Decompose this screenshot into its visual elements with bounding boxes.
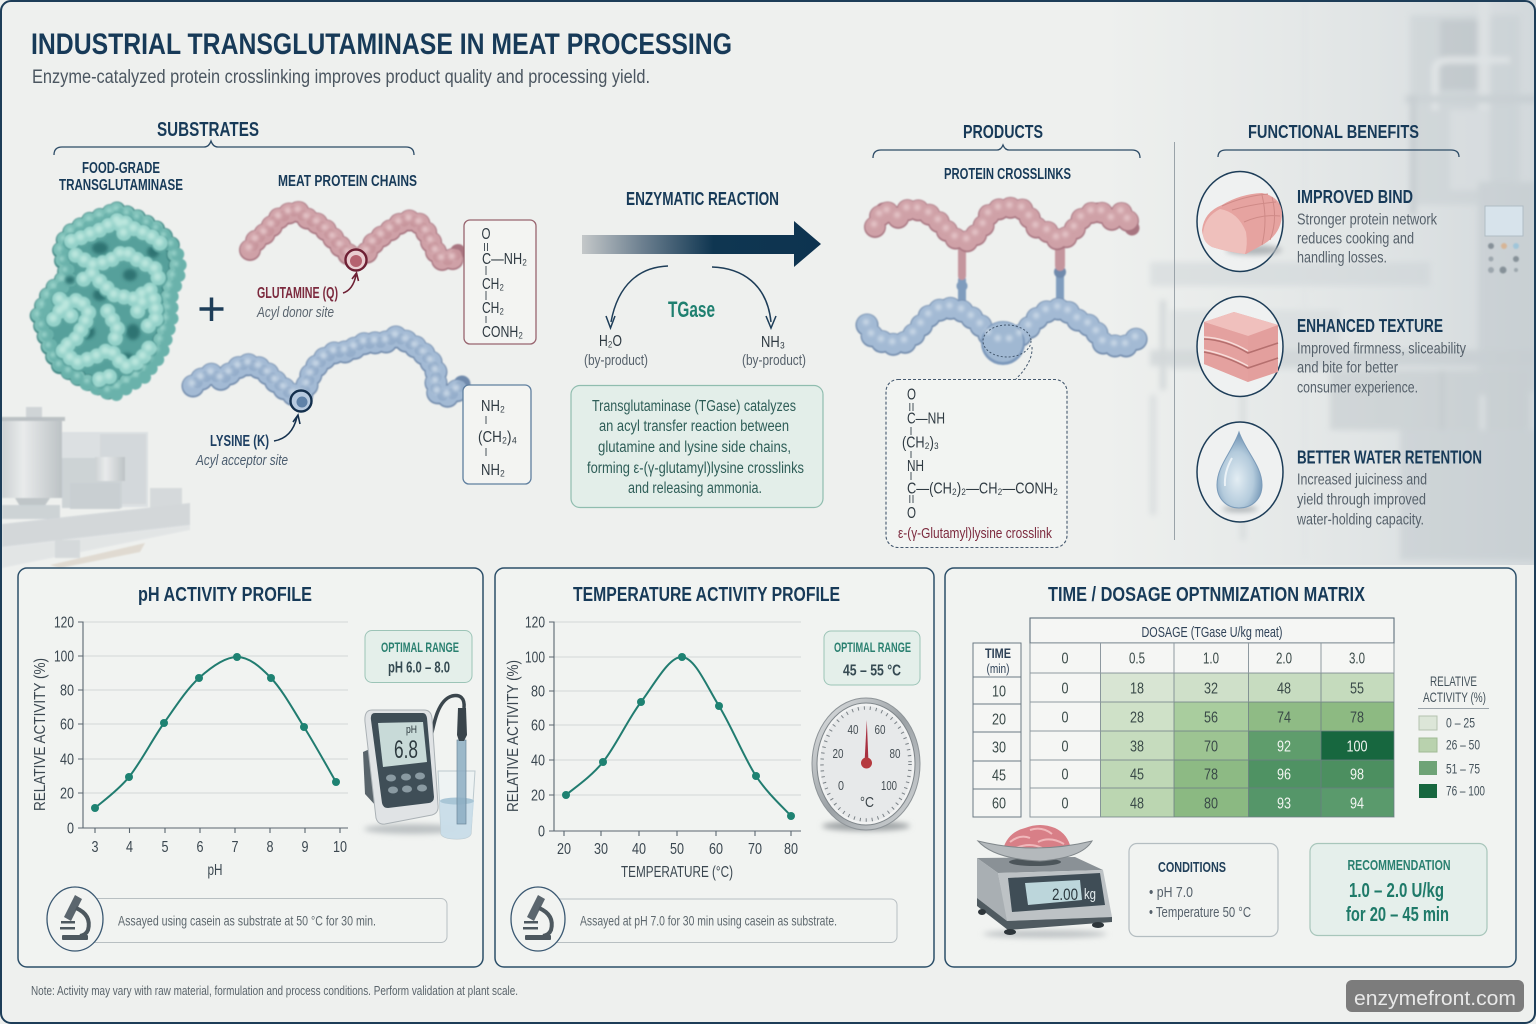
arrow: ammonia by-product	[712, 267, 776, 328]
benefit text: yield through improved	[1297, 492, 1426, 508]
note: pH assay conditions	[47, 887, 447, 951]
label: ammonia by-product: NH₃	[761, 334, 785, 351]
callout: optimal pH range	[365, 630, 472, 682]
benefit text	[1297, 212, 1438, 266]
note: temperature assay conditions: Assayed at pH 7.0 for 30 min using casein as substrate.	[580, 912, 837, 928]
benefit: enhanced texture	[1197, 296, 1466, 396]
callout: optimal temperature range: 45 – 55 °C	[843, 662, 901, 680]
icon: water drop	[1197, 422, 1283, 522]
line chart: pH: 3	[92, 839, 99, 856]
section: products	[866, 121, 1140, 548]
heat map table: 80	[1204, 796, 1218, 812]
heat map table: 0	[1062, 796, 1069, 812]
heat map table: 56	[1204, 710, 1218, 726]
arrow: reaction direction	[582, 221, 821, 267]
note: temperature assay conditions	[511, 887, 897, 951]
heat map table: 92	[1277, 738, 1291, 756]
formula box: crosslink structure: C—NH	[907, 410, 945, 428]
arrow: lysine pointer	[274, 415, 300, 441]
line chart: temperature: 20	[557, 841, 571, 858]
line chart: pH: 0	[67, 820, 74, 838]
heat map table	[1030, 618, 1394, 817]
line chart: temperature: 40	[632, 841, 646, 858]
icon: meat block	[1197, 296, 1283, 396]
arrow: water by-product	[606, 266, 668, 328]
crosslinked protein chains	[866, 204, 1138, 365]
time column: 60	[992, 796, 1006, 812]
benefit: better water retention	[1197, 422, 1482, 528]
panel: time / dosage optimization matrix	[945, 568, 1516, 967]
section: enzymatic reaction	[571, 189, 823, 508]
line chart: pH: 4	[126, 839, 133, 856]
line chart: temperature: 60	[531, 718, 545, 734]
watermark	[1346, 980, 1524, 1012]
card: conditions	[1129, 844, 1278, 936]
callout: reaction description: forming ε-(γ-glutamyl)lysine crosslinks	[587, 460, 804, 477]
heat map table: 2.0	[1276, 650, 1292, 668]
line chart: temperature: 30	[594, 841, 608, 858]
label: glutamine: Acyl donor site	[256, 304, 334, 321]
time column: 10	[992, 684, 1006, 700]
legend: relative activity: 51 – 75	[1446, 762, 1480, 776]
icon: pH meter	[363, 696, 475, 839]
callout: reaction description	[571, 386, 823, 508]
heat map table: 3.0	[1349, 650, 1365, 668]
heading: substrates: SUBSTRATES	[157, 119, 259, 141]
line chart: pH: 80	[60, 682, 74, 700]
connector: crosslink detail	[1016, 347, 1032, 379]
icon: thermometer gauge: 100	[881, 779, 897, 793]
card: recommendation: RECOMMENDATION	[1348, 857, 1450, 874]
heat map table: 98	[1350, 766, 1364, 784]
line chart: pH: 5	[162, 839, 169, 856]
line chart: pH: 8	[266, 839, 274, 856]
line chart: pH	[32, 614, 348, 879]
line chart: pH: 9	[302, 839, 309, 856]
legend: relative activity: ACTIVITY (%)	[1423, 689, 1486, 705]
formula box: crosslink structure: O	[907, 505, 916, 522]
label: lysine: LYSINE (K)	[210, 433, 269, 450]
formula box: lysine side chain: NH₂	[481, 462, 505, 479]
title: INDUSTRIAL TRANSGLUTAMINASE IN MEAT PROCESSING	[31, 28, 732, 61]
icon: thermometer gauge: °C	[860, 794, 874, 811]
heat map table: 48	[1277, 680, 1291, 698]
formula box: glutamine side chain: CONH₂	[482, 324, 523, 341]
icon: microscope	[47, 887, 103, 951]
heading: products: PRODUCTS	[963, 121, 1043, 142]
label: glutamine: GLUTAMINE (Q)	[257, 285, 338, 302]
heat map table: 38	[1130, 738, 1144, 756]
callout: reaction description: and releasing ammonia.	[628, 480, 762, 497]
time column: 30	[992, 740, 1006, 756]
heat map table: 0	[1062, 650, 1069, 668]
heat map table: 48	[1130, 796, 1144, 812]
label: ammonia by-product: (by-product)	[742, 352, 806, 369]
line chart: pH: 100	[54, 648, 74, 666]
panel heading: TIME / DOSAGE OPTNMIZATION MATRIX	[1048, 584, 1366, 606]
benefit text: reduces cooking and	[1297, 230, 1414, 248]
label: water by-product	[584, 333, 648, 369]
icon: weighing scale with meat: kg	[1084, 886, 1096, 903]
subtitle: Enzyme-catalyzed protein crosslinking improves product quality and processing yield.	[32, 67, 650, 88]
formula box: crosslink structure: ε-(γ-Glutamyl)lysine crosslink	[898, 525, 1052, 542]
label: meat protein chains: MEAT PROTEIN CHAINS	[278, 173, 417, 190]
heat map table: 28	[1130, 710, 1144, 726]
heat map table: DOSAGE (TGase U/kg meat)	[1142, 625, 1282, 641]
heat map table: 0	[1062, 766, 1069, 784]
enzyme molecule: teal protein	[37, 208, 181, 396]
benefit text	[1296, 472, 1427, 528]
formula box: lysine side chain: NH₂	[481, 398, 505, 415]
label: ammonia by-product	[742, 334, 806, 369]
heat map table: 94	[1350, 796, 1364, 812]
line chart: temperature: 50	[670, 841, 684, 858]
callout: optimal temperature range: OPTIMAL RANGE	[834, 639, 911, 655]
heading: enzymatic reaction: ENZYMATIC REACTION	[626, 189, 779, 209]
line chart: temperature: 70	[748, 841, 762, 858]
heat map table: 100	[1346, 738, 1368, 756]
heading: functional benefits: FUNCTIONAL BENEFITS	[1248, 121, 1419, 142]
icon: pH meter: 6.8	[394, 736, 418, 764]
benefit text: consumer experience.	[1297, 380, 1418, 396]
chain: glutamine meat protein	[249, 207, 458, 270]
formula box: crosslink structure: C—(CH₂)₂—CH₂—CONH₂	[907, 480, 1058, 498]
line chart: pH: RELATIVE ACTIVITY (%)	[32, 658, 49, 811]
line chart: temperature: 40	[531, 752, 545, 770]
icon: microscope	[511, 887, 565, 951]
brace: functional benefits	[1218, 150, 1459, 157]
label: food-grade transglutaminase: TRANSGLUTAMINASE	[59, 177, 183, 194]
divider	[1174, 142, 1176, 540]
formula box: glutamine side chain: CH₂	[482, 276, 504, 293]
heat map table: 96	[1277, 766, 1291, 784]
callout: reaction description: an acyl transfer reaction between	[599, 418, 789, 435]
icon: thermometer gauge	[812, 698, 920, 831]
line chart: temperature: 20	[531, 788, 545, 804]
label: lysine: Acyl acceptor site	[195, 452, 288, 469]
heat map table: 32	[1204, 680, 1218, 698]
line chart: temperature: 0	[538, 824, 545, 840]
arrow: glutamine pointer	[343, 273, 358, 293]
benefit heading: ENHANCED TEXTURE	[1297, 315, 1443, 336]
time column: (min)	[986, 661, 1010, 676]
heat map table: 1.0	[1203, 650, 1219, 668]
heat map table: 18	[1130, 680, 1144, 698]
formula box: crosslink structure: NH	[907, 458, 924, 475]
icon: thermometer gauge: 0	[838, 779, 844, 793]
label: glutamine	[256, 285, 338, 321]
line chart: temperature: 100	[525, 650, 545, 666]
line chart: temperature	[505, 614, 801, 881]
line chart: pH: 7	[232, 839, 239, 856]
icon: thermometer gauge: 80	[890, 747, 901, 761]
time column	[973, 643, 1021, 817]
callout: reaction description: Transglutaminase (TGase) catalyzes	[592, 398, 796, 415]
legend: relative activity: RELATIVE	[1430, 673, 1477, 689]
plus sign	[200, 298, 224, 321]
section: functional benefits	[1197, 121, 1482, 528]
legend: relative activity: 0 – 25	[1446, 716, 1475, 730]
heat map table: 93	[1277, 796, 1291, 812]
icon: weighing scale with meat: 2.00	[1052, 885, 1078, 904]
time column: 20	[992, 712, 1006, 728]
formula box: glutamine side chain: CH₂	[482, 300, 504, 317]
card: recommendation: for 20 – 45 min	[1346, 904, 1449, 926]
heat map table: 0	[1062, 680, 1069, 698]
watermark: enzymefront.com	[1354, 988, 1516, 1010]
panel: pH activity profile	[18, 568, 483, 967]
icon: pH meter: pH	[406, 724, 417, 736]
callout: reaction description: glutamine and lysine side chains,	[598, 439, 791, 456]
formula box: crosslink structure	[886, 380, 1067, 548]
line chart: temperature: 80	[531, 684, 545, 700]
time column: 45	[992, 768, 1006, 784]
formula box: lysine side chain	[463, 385, 531, 484]
label: lysine	[195, 433, 288, 469]
callout: optimal pH range: pH 6.0 – 8.0	[388, 660, 450, 676]
line chart: temperature: TEMPERATURE (°C)	[621, 864, 733, 881]
icon: thermometer gauge: 40	[848, 723, 859, 737]
label: water by-product: (by-product)	[584, 352, 648, 369]
heat map table: 0.5	[1129, 650, 1145, 668]
footnote: Note: Activity may vary with raw material, formulation and process conditions. Perform validation at plant scale.	[31, 984, 518, 998]
formula box: glutamine side chain: O	[482, 226, 490, 243]
card: recommendation: 1.0 – 2.0 U/kg	[1349, 880, 1444, 902]
note: pH assay conditions: Assayed using casein as substrate at 50 °C for 30 min.	[118, 912, 376, 928]
formula box: glutamine side chain: C—NH₂	[482, 251, 527, 268]
icon: meat loaf	[1197, 172, 1283, 272]
benefit: improved bind	[1197, 172, 1438, 272]
legend: relative activity: 76 – 100	[1446, 784, 1485, 798]
panel heading: TEMPERATURE ACTIVITY PROFILE	[573, 584, 840, 606]
heat map table: 70	[1204, 738, 1218, 756]
formula box: lysine side chain: (CH₂)₄	[478, 429, 517, 446]
panel: temperature activity profile	[495, 568, 934, 967]
legend: relative activity	[1418, 673, 1489, 798]
benefit text: Stronger protein network	[1297, 212, 1438, 228]
label: protein crosslinks: PROTEIN CROSSLINKS	[944, 166, 1071, 183]
heat map table: 45	[1130, 766, 1144, 784]
icon: weighing scale with meat	[977, 825, 1112, 938]
card: recommendation	[1310, 844, 1487, 936]
card: conditions: CONDITIONS	[1158, 859, 1226, 876]
heat map table: 55	[1350, 680, 1364, 698]
panel heading: pH ACTIVITY PROFILE	[138, 584, 312, 606]
benefit text: handling losses.	[1297, 250, 1387, 266]
heat map table: 78	[1350, 710, 1364, 726]
line chart: pH: 20	[60, 786, 74, 802]
brace: products	[873, 145, 1140, 158]
callout: optimal temperature range	[824, 631, 920, 685]
line chart: temperature: 80	[784, 841, 798, 858]
label: water by-product: H₂O	[599, 333, 622, 350]
heat map table: 0	[1062, 738, 1069, 756]
chain: lysine meat protein	[192, 334, 462, 412]
line chart: pH: 6	[196, 839, 204, 856]
line chart: pH: 60	[60, 716, 74, 734]
line chart: pH: pH	[208, 862, 222, 879]
line chart: pH: 10	[333, 839, 347, 856]
line chart: pH: 40	[60, 752, 74, 768]
formula box: crosslink structure: (CH₂)₃	[902, 434, 939, 452]
card: conditions: • Temperature 50 °C	[1149, 904, 1251, 921]
brace: substrates	[54, 141, 414, 155]
benefit text	[1297, 340, 1466, 396]
card: conditions: • pH 7.0	[1149, 884, 1193, 901]
benefit heading: IMPROVED BIND	[1297, 186, 1413, 207]
background: factory left	[0, 407, 190, 568]
legend: relative activity: 26 – 50	[1446, 738, 1480, 752]
benefit text: and bite for better	[1297, 360, 1399, 376]
benefit text: Improved firmness, sliceability	[1297, 340, 1466, 358]
line chart: temperature: 120	[525, 614, 545, 632]
formula box: crosslink structure: O	[907, 386, 916, 404]
heat map table: 0	[1062, 710, 1069, 726]
time column: TIME	[985, 645, 1011, 661]
label: TGase: TGase	[668, 297, 715, 322]
icon: thermometer gauge: 20	[832, 747, 844, 761]
heat map table: 78	[1204, 766, 1218, 784]
section: substrates	[37, 119, 536, 484]
line chart: temperature: 60	[709, 841, 723, 858]
benefit text: water-holding capacity.	[1296, 512, 1424, 528]
label: food-grade transglutaminase: FOOD-GRADE	[82, 160, 160, 177]
line chart: temperature: RELATIVE ACTIVITY (%)	[505, 660, 522, 812]
icon: thermometer gauge: 60	[874, 723, 886, 737]
callout: optimal pH range: OPTIMAL RANGE	[381, 639, 459, 655]
heat map table: 74	[1277, 710, 1291, 726]
benefit text: Increased juiciness and	[1297, 472, 1427, 488]
formula box: glutamine side chain	[464, 220, 536, 344]
background: factory right	[1100, 0, 1536, 565]
label: food-grade transglutaminase	[59, 160, 183, 194]
line chart: pH: 120	[54, 614, 74, 632]
